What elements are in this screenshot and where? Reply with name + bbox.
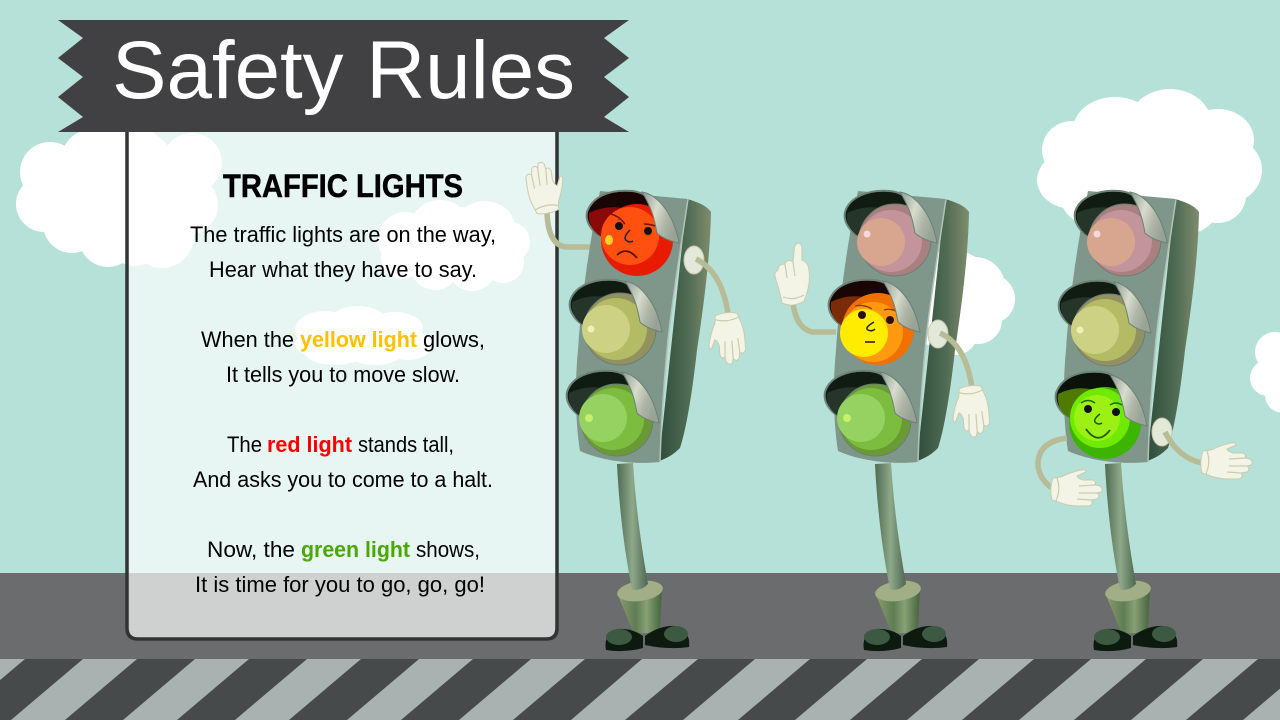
poem stanza 3: The (227, 432, 262, 457)
poem heading: TRAFFIC LIGHTS (223, 168, 463, 204)
panel: poem card (127, 125, 557, 639)
poem stanza 4: It is time for you to go, go, go! (195, 572, 485, 597)
poem stanza 2 (201, 327, 485, 387)
poem stanza 4: green light (301, 537, 411, 562)
poem stanza 2: glows, (423, 327, 485, 352)
sky background (0, 0, 1280, 573)
poem stanza 4: shows, (416, 537, 480, 562)
traffic light: green, smiling (1038, 191, 1252, 651)
poem stanza 2: When the (201, 327, 294, 352)
poem stanza 3 (193, 432, 493, 492)
traffic light: yellow, neutral (775, 191, 991, 651)
cloud: behind poem upper (378, 200, 530, 291)
cloud: right edge (1250, 332, 1280, 413)
poem stanza 4: Now, the (207, 537, 295, 562)
poem stanza 1: The traffic lights are on the way, (190, 222, 496, 247)
poem stanza 1: Hear what they have to say. (209, 257, 477, 282)
crosswalk (0, 659, 1280, 720)
cloud: upper left (16, 123, 222, 268)
poem stanza 3: red light (267, 432, 353, 457)
title: Safety Rules (112, 25, 575, 116)
road (0, 573, 1280, 660)
cloud: upper right (1037, 89, 1262, 233)
poem stanza 3: stands tall, (358, 432, 454, 457)
poem stanza 4 (195, 537, 485, 597)
cloud: behind poem middle (295, 306, 432, 365)
poem stanza 2: yellow light (300, 327, 418, 352)
poem stanza 1 (190, 222, 496, 282)
banner (58, 20, 629, 132)
cloud: behind second traffic light (900, 250, 1015, 355)
icon: pointing hand (775, 243, 809, 305)
traffic light: red, frowning (524, 160, 747, 651)
poem stanza 2: It tells you to move slow. (226, 362, 460, 387)
poem stanza 3: And asks you to come to a halt. (193, 467, 493, 492)
